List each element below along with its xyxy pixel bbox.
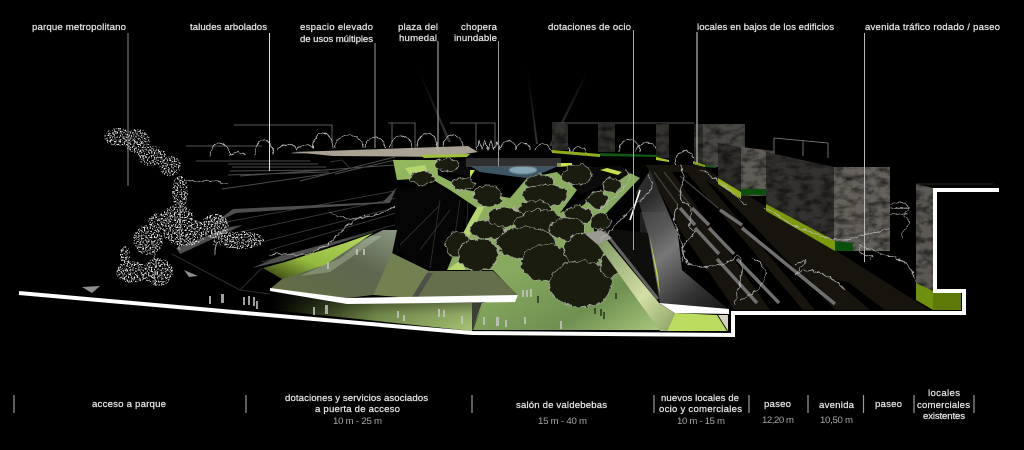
background building outlines — [186, 123, 694, 148]
label: locales comerciales existentes: existentes — [923, 411, 965, 422]
roof white edge — [270, 288, 518, 304]
street tree outlines — [600, 165, 916, 305]
callout: parque metropolitano: parque metropolitano — [32, 22, 126, 33]
dark triangles between paths — [442, 160, 632, 214]
interior shading — [272, 291, 472, 331]
left tree branch lines — [155, 180, 470, 285]
callout: espacio elevado: de usos múltiples — [300, 34, 373, 45]
dark tree canopies — [410, 159, 621, 307]
sloped walkway roof lines — [172, 254, 270, 294]
callout: plaza del humedal: plaza del — [398, 22, 438, 33]
callout: dotaciones de ocio: dotaciones de ocio — [548, 22, 631, 33]
green paths and plaza — [393, 160, 663, 330]
deck green edge — [420, 154, 470, 158]
label: acceso a parque: acceso a parque — [92, 399, 166, 410]
grey hillside stripes — [176, 187, 397, 268]
foreground lime base — [916, 283, 933, 310]
white corner band — [659, 303, 729, 314]
label: paseo: paseo — [875, 399, 902, 410]
roof: glow — [300, 236, 382, 276]
small grey arrows — [82, 270, 198, 293]
roof: ridge — [412, 273, 433, 297]
promenade light dots — [640, 212, 666, 234]
label: salón de valdebebas: salón de valdebebas — [516, 400, 607, 411]
plaza lit ramp band — [598, 240, 675, 331]
translucent poplar screen — [466, 158, 561, 167]
label: nuevos locales — [659, 393, 742, 427]
roof: lit sliver — [263, 233, 373, 279]
wire box behind buildings — [774, 138, 828, 158]
people silhouettes — [209, 249, 562, 329]
label: paseo 12,20 m: 12,20 m — [762, 415, 794, 426]
label: dotaciones y servicios — [285, 393, 428, 427]
right background tree — [888, 202, 910, 238]
label: dotaciones y servicios: 10 m - 25 m — [333, 416, 382, 427]
label: nuevos locales: nuevos locales de — [661, 393, 739, 404]
wedge grey edge — [604, 231, 658, 299]
road black bands — [672, 172, 885, 310]
label: nuevos locales: ocio y comerciales — [659, 404, 742, 415]
roof: left facet — [270, 230, 397, 298]
callout: taludes arbolados: taludes arbolados — [190, 22, 267, 33]
speckled foreground trees — [104, 128, 264, 286]
grey promenade plane — [636, 170, 729, 310]
label: nuevos locales: 10 m - 15 m — [677, 416, 725, 427]
interior space under roof — [272, 291, 483, 331]
label: paseo 12,20 m: paseo — [764, 399, 791, 410]
label: locales comerciales existentes: comerciales — [917, 400, 970, 411]
road surface — [646, 165, 930, 310]
label: paseo 12,20 m — [762, 399, 794, 426]
foreground building roof line — [916, 183, 993, 185]
light rays — [418, 70, 588, 146]
callout: espacio elevado — [300, 22, 375, 148]
callout: espacio elevado: espacio elevado — [300, 22, 373, 33]
section labels — [92, 388, 970, 427]
main building base — [766, 204, 835, 251]
callout: locales en bajos: locales en bajos de los edificios — [697, 22, 834, 33]
callout: chopera inundable — [454, 22, 498, 166]
bright green patches — [405, 165, 484, 270]
callout: chopera inundable: chopera — [461, 22, 498, 33]
label: salón de valdebebas — [516, 400, 607, 427]
lit edge accents — [470, 163, 622, 178]
callout: plaza del humedal: humedal — [399, 33, 437, 44]
callout: avenida: avenida tráfico rodado / paseo — [865, 22, 1000, 33]
label: salón de valdebebas: 15 m - 40 m — [538, 416, 587, 427]
left terraced slope lines — [196, 153, 470, 189]
label: avenida 10,50 m — [819, 400, 855, 426]
back dark panels — [552, 123, 669, 158]
mid building — [718, 143, 775, 196]
main building — [766, 152, 890, 251]
callout: plaza del humedal — [398, 22, 438, 152]
label: dotaciones y servicios: a puerta de acceso — [315, 404, 400, 415]
label: avenida 10,50 m: avenida — [819, 400, 855, 411]
callout: chopera inundable: inundable — [454, 33, 497, 44]
section dimension ticks — [14, 395, 974, 413]
label: dotaciones y servicios: dotaciones y servicios asociados — [285, 393, 428, 404]
white section outline — [19, 190, 999, 335]
road lane stripes — [654, 172, 835, 304]
hillside block fan lines — [400, 200, 468, 270]
back green strips — [552, 150, 716, 168]
white edge on promenade — [630, 190, 640, 220]
wetland water — [470, 166, 558, 178]
roof: right facet — [413, 271, 518, 298]
label: avenida 10,50 m: 10,50 m — [820, 415, 853, 426]
mid building base — [718, 178, 741, 199]
back building with commercial base — [694, 124, 745, 167]
wedge lime edge — [649, 233, 660, 296]
tree skyline outlines — [210, 133, 768, 198]
hillside dark block behind plaza — [395, 178, 470, 272]
dark people on plaza — [537, 293, 617, 319]
foreground building — [916, 184, 933, 292]
roof: mid facet — [373, 253, 429, 298]
black leisure wedge building — [603, 228, 660, 303]
label: locales comerciales existentes: locales — [928, 388, 960, 399]
foreground olive base — [933, 293, 961, 310]
lime corner plane — [667, 313, 727, 331]
label: locales comerciales existentes — [917, 388, 970, 422]
wedge stairs — [585, 230, 612, 245]
cream corner — [718, 315, 728, 331]
callouts — [32, 22, 1000, 262]
elevated multipurpose deck — [293, 146, 478, 157]
interior end wall — [472, 303, 482, 331]
left hillside fan — [215, 190, 440, 262]
